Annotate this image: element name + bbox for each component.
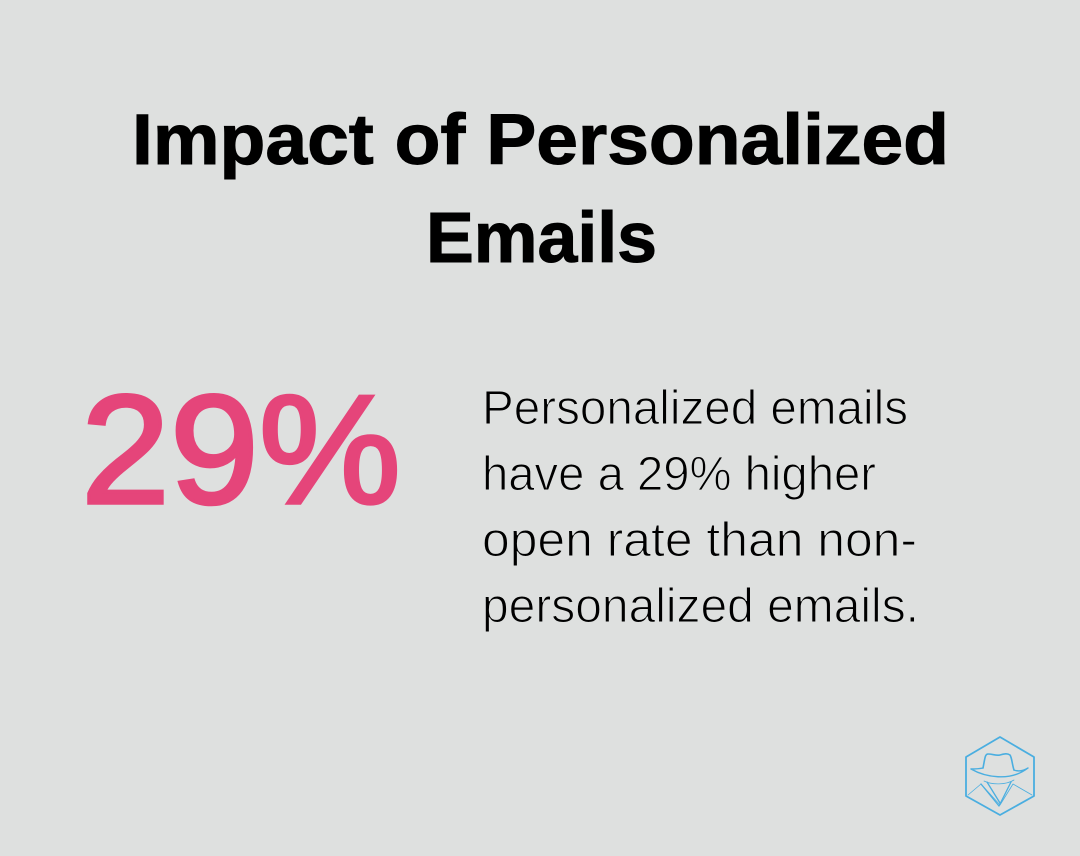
title [132, 101, 949, 278]
big statistic: 29%: 29% [81, 363, 401, 536]
description text: personalized emails. [482, 580, 919, 633]
description text: Personalized emails [482, 382, 908, 435]
icon: hexagon logo with spy hat [966, 737, 1034, 815]
description text: have a 29% higher [482, 448, 876, 501]
title: Impact of Personalized [132, 101, 949, 180]
description text [482, 382, 919, 633]
description text: open rate than non- [482, 514, 917, 567]
title: Emails [426, 199, 657, 278]
